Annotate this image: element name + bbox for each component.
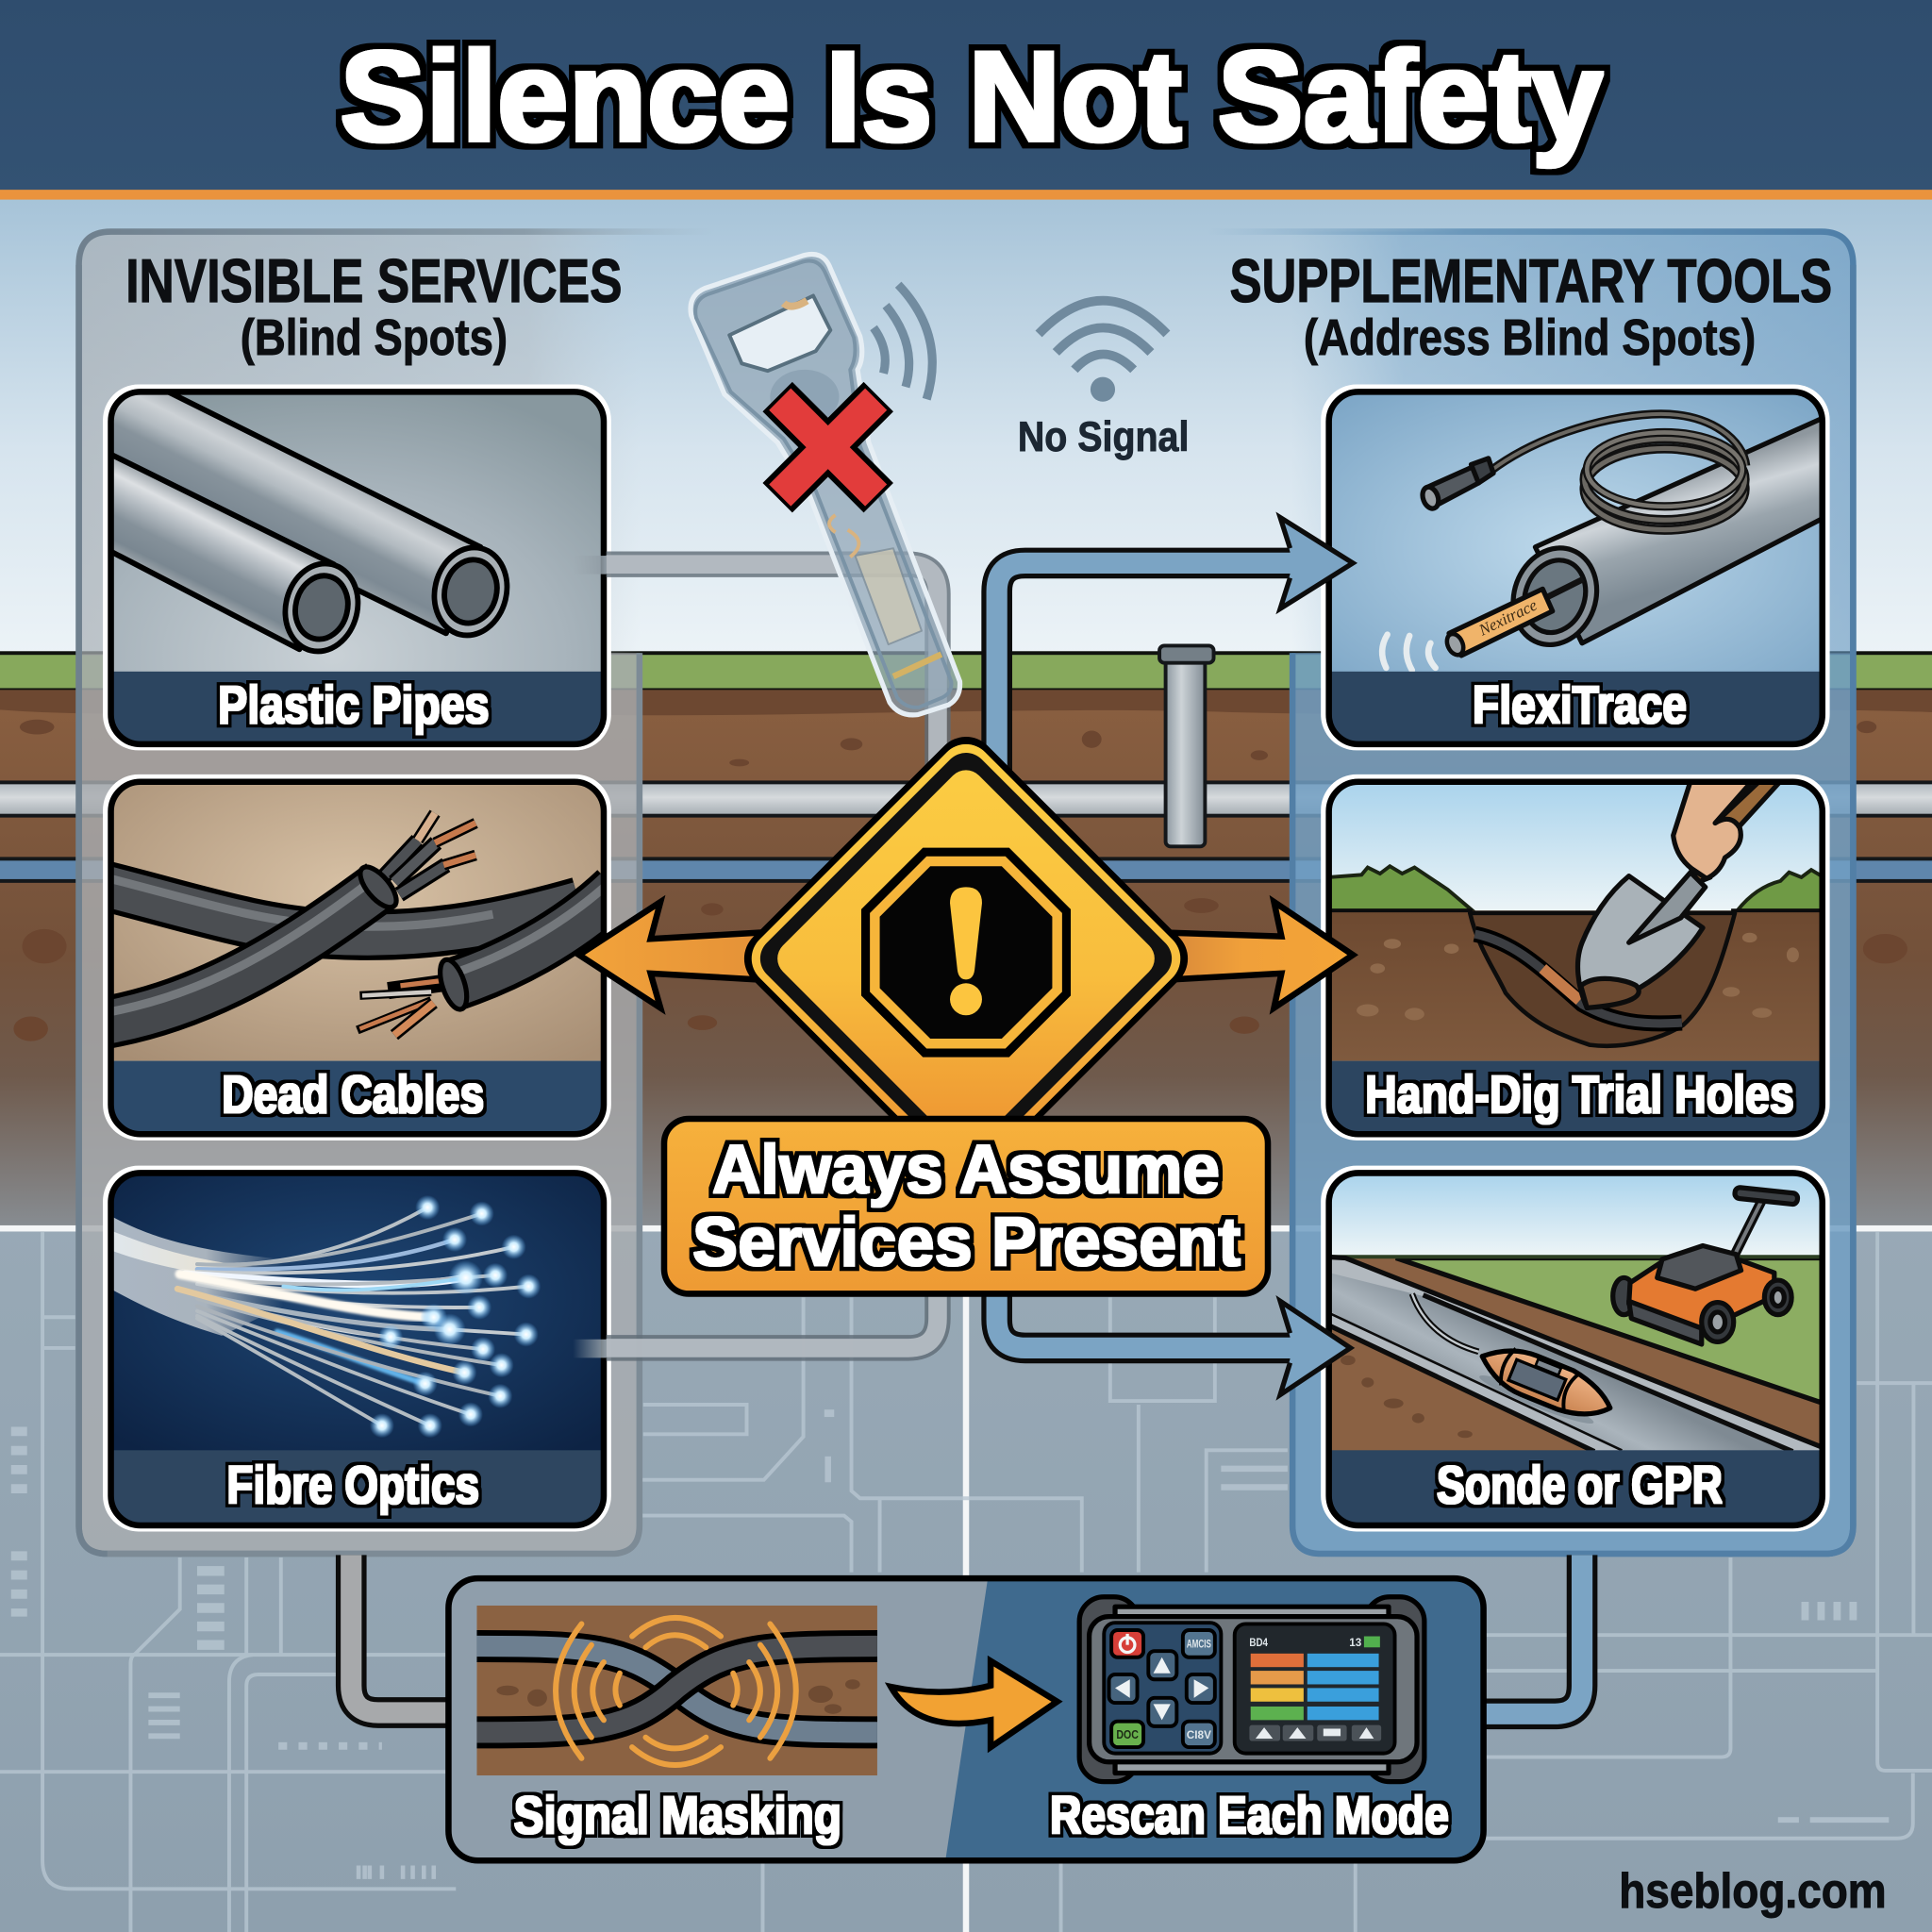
- icon: connector plug: [1420, 458, 1493, 510]
- scanner button arrows: [1115, 1657, 1208, 1720]
- card: sonde or GPR: Sonde or GPR: [1437, 1455, 1723, 1514]
- header bar: [0, 0, 1932, 200]
- card: fibre optics: [103, 1166, 611, 1532]
- icon: coiled tracer cable: [1491, 414, 1746, 530]
- icon: grass mounds: [1328, 866, 1824, 910]
- connector: grey to bottom panel: [351, 1555, 450, 1713]
- icon: lower pipe: [113, 453, 360, 655]
- callout banner: Always Assume: [712, 1131, 1220, 1208]
- panel: rescan strip: [448, 1576, 1486, 1863]
- icon: upper pipe: [114, 394, 509, 638]
- scanner button labels: AMCIS: [1187, 1638, 1211, 1650]
- scanner button labels: [1116, 1637, 1362, 1741]
- card: FlexiTrace: [1321, 385, 1848, 750]
- icon: second cut cable: [358, 882, 616, 1035]
- icon: pipe trench: [1324, 1257, 1824, 1454]
- icon: dug hole: [1470, 913, 1735, 1046]
- icon: fibre strands: [177, 1208, 528, 1425]
- heading: invisible services: INVISIBLE SERVICES: [125, 246, 623, 315]
- icon: fibre light tips: [370, 1195, 541, 1438]
- heading: supplementary tools: (Address Blind Spots): [1304, 310, 1756, 366]
- road line: [0, 1225, 1932, 1231]
- callout banner: Services Present: [692, 1204, 1241, 1280]
- icon: shovel: [1578, 781, 1780, 1008]
- scanner button labels: CI8V: [1187, 1729, 1211, 1741]
- interference arcs: [556, 1618, 796, 1765]
- connector: lower blue arrow to tools: [997, 1281, 1351, 1395]
- scanner mode icons: [1249, 1725, 1381, 1741]
- label: signal masking: Signal Masking: [514, 1786, 841, 1845]
- icon: fibre bundle sheath: [108, 1215, 283, 1336]
- panel: invisible services backdrop: [77, 232, 715, 1555]
- panel: supplementary tools backdrop: [1208, 232, 1855, 1555]
- icon: sonde device: [1472, 1337, 1618, 1433]
- scanner buttons: [1109, 1630, 1215, 1747]
- icon: long cable: [105, 877, 579, 935]
- watermark: hseblog.com: [1619, 1864, 1887, 1919]
- soil stones: [1341, 1356, 1473, 1438]
- scanner button labels: DOC: [1116, 1727, 1139, 1741]
- heading: invisible services: [125, 246, 623, 366]
- masking cable: straight sections and twist: [468, 1646, 887, 1732]
- title: Silence Is Not Safety: [340, 25, 1603, 168]
- grass strip: [0, 653, 1932, 690]
- arrow: orange left: [579, 902, 758, 1008]
- card: fibre optics: Fibre Optics: [226, 1455, 479, 1514]
- icon: signal arcs at locator: [874, 285, 932, 399]
- icon: orange sonde: [1443, 579, 1583, 658]
- icon: GPR cart: [1613, 1187, 1798, 1344]
- card: sonde or GPR: [1321, 1166, 1830, 1532]
- caption band: [111, 1450, 604, 1524]
- locator panel: [855, 548, 922, 644]
- heading: invisible services: (Blind Spots): [241, 310, 508, 366]
- buried blue pipe: [0, 858, 1932, 881]
- arrow: curved orange: [891, 1661, 1058, 1747]
- icon: no signal wifi: [1039, 301, 1167, 402]
- arrow: orange right: [1171, 902, 1353, 1008]
- caption band: [1328, 1450, 1824, 1524]
- caption band: [1328, 1061, 1824, 1135]
- callout banner: [664, 1119, 1268, 1293]
- connector: blind spots grey link: [573, 556, 938, 1357]
- card: plastic pipes: Plastic Pipes: [218, 675, 490, 735]
- soil stones: [13, 720, 1907, 1041]
- caption band: [111, 672, 604, 745]
- card: hand-dig trial holes: Hand-Dig Trial Holes: [1365, 1064, 1794, 1124]
- icon: hand: [1674, 781, 1752, 878]
- scanner button labels: BD4: [1249, 1637, 1268, 1649]
- heading: supplementary tools: [1230, 246, 1832, 366]
- scanner screen bars: [1251, 1637, 1380, 1720]
- icon: handheld scanner: [1079, 1597, 1424, 1782]
- connector: upper blue arrow to tools: [997, 518, 1353, 789]
- scanner button labels: 13: [1349, 1637, 1362, 1649]
- icon: grass slope: [1396, 1258, 1824, 1404]
- icon: red cross: [777, 397, 878, 498]
- icon: exposed cable: [1474, 934, 1682, 1024]
- icon: cut cable with copper wires: [105, 813, 475, 1023]
- locator handle hole: [729, 295, 830, 371]
- warning diamond sign: [775, 768, 1157, 1150]
- icon: service post: [1159, 645, 1214, 846]
- card: dead cables: [103, 774, 616, 1141]
- label: no signal: No Signal: [1018, 414, 1189, 460]
- icon: signal waves: [1382, 635, 1436, 671]
- buried grey pipe: [0, 782, 1932, 816]
- icon: cable locator (faded): [691, 255, 960, 715]
- icon: sonde cable: [1412, 1293, 1478, 1352]
- card: plastic pipes: [103, 385, 611, 751]
- scanner power ring: [1120, 1634, 1135, 1653]
- illustration: signal masking: [468, 1606, 887, 1775]
- connector: blue to bottom panel: [1482, 1555, 1582, 1714]
- circuit map lines: [0, 1232, 1932, 1932]
- caption band: [111, 1061, 604, 1135]
- card: hand-dig trial holes: [1321, 774, 1830, 1141]
- icon: orange sonde: Nexitrace: [1475, 595, 1541, 640]
- card: dead cables: Dead Cables: [222, 1064, 484, 1124]
- caption band: [1328, 672, 1824, 745]
- label: rescan each mode: Rescan Each Mode: [1050, 1786, 1449, 1845]
- icon: octagon with exclamation mark: [861, 848, 1071, 1058]
- icon: pipe with opening: [1510, 417, 1819, 647]
- soil stones: [1357, 933, 1799, 1020]
- soil ground: [1328, 910, 1824, 1061]
- card: FlexiTrace: FlexiTrace: [1473, 675, 1687, 735]
- soil layer: [0, 690, 1932, 1226]
